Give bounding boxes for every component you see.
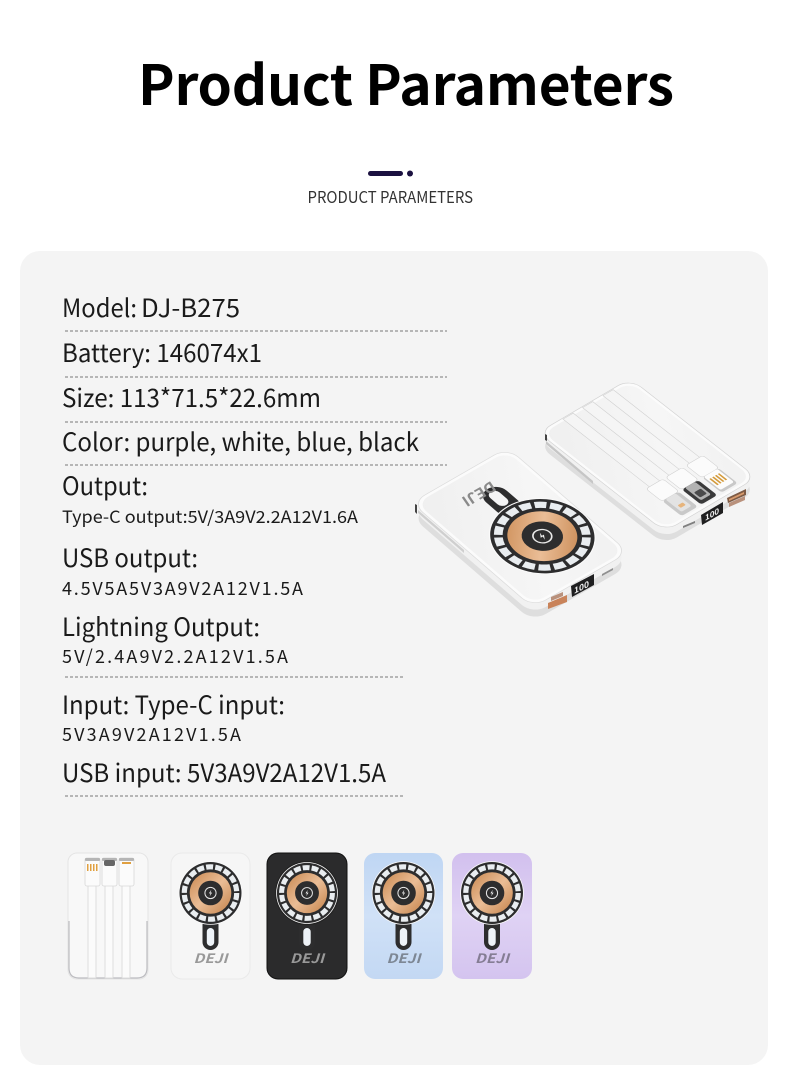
text block: battery: Battery: 146074x1	[62, 334, 262, 370]
text block: lightning output	[62, 608, 403, 677]
text block: size: Size: 113*71.5*22.6mm	[62, 379, 321, 415]
text block: lightning output: Lightning Output:	[62, 608, 260, 644]
text block: model: Model:	[62, 289, 137, 325]
text block: model: DJ-B275	[141, 289, 240, 325]
panel: parameters	[20, 251, 768, 1065]
text block: usb output: USB output:	[62, 539, 198, 575]
product image: blue front view	[364, 853, 443, 979]
product image: white front view: DEJI	[194, 948, 230, 967]
product image: purple front view: DEJI	[475, 948, 511, 967]
product image: white back view	[68, 853, 148, 979]
text block: lightning output: 5V/2.4A9V2.2A12V1.5A	[62, 643, 288, 669]
product image: front of power bank with wireless ring: DEJI	[455, 477, 505, 511]
sockets and connector tips	[662, 468, 738, 516]
text block: usb output: 4.5V5A5V3A9V2A12V1.5A	[62, 575, 303, 601]
product image: front of power bank with wireless ring	[412, 447, 629, 621]
product image: front of power bank with wireless ring: 100	[574, 577, 589, 597]
product image: blue front view: DEJI	[386, 948, 423, 967]
text block: usb output	[62, 539, 303, 601]
product image: back of power bank with cables: 100	[705, 505, 719, 524]
text block: type-c input: Input: Type-C input:	[62, 686, 285, 722]
product image: purple front view	[452, 853, 532, 979]
text block: model	[62, 289, 447, 331]
product image: back of power bank with cables	[538, 378, 757, 545]
text block: output: Output:	[62, 467, 148, 503]
text block: type-c input	[62, 686, 285, 747]
text block: usb input: USB input: 5V3A9V2A12V1.5A	[62, 754, 387, 790]
product image: white front view	[171, 853, 250, 979]
title: Product Parameters	[138, 41, 674, 121]
product image: black front view	[267, 853, 347, 979]
title accent mark	[368, 170, 413, 176]
text block: output	[62, 467, 359, 528]
product image: black front view: DEJI	[290, 948, 326, 967]
text block: output: Type-C output:5V/3A9V2.2A12V1.6A	[62, 503, 359, 528]
text block: color: Color: purple, white, blue, black	[62, 423, 419, 459]
subtitle: PRODUCT PARAMETERS	[308, 184, 473, 208]
text block: type-c input: 5V3A9V2A12V1.5A	[62, 721, 241, 747]
